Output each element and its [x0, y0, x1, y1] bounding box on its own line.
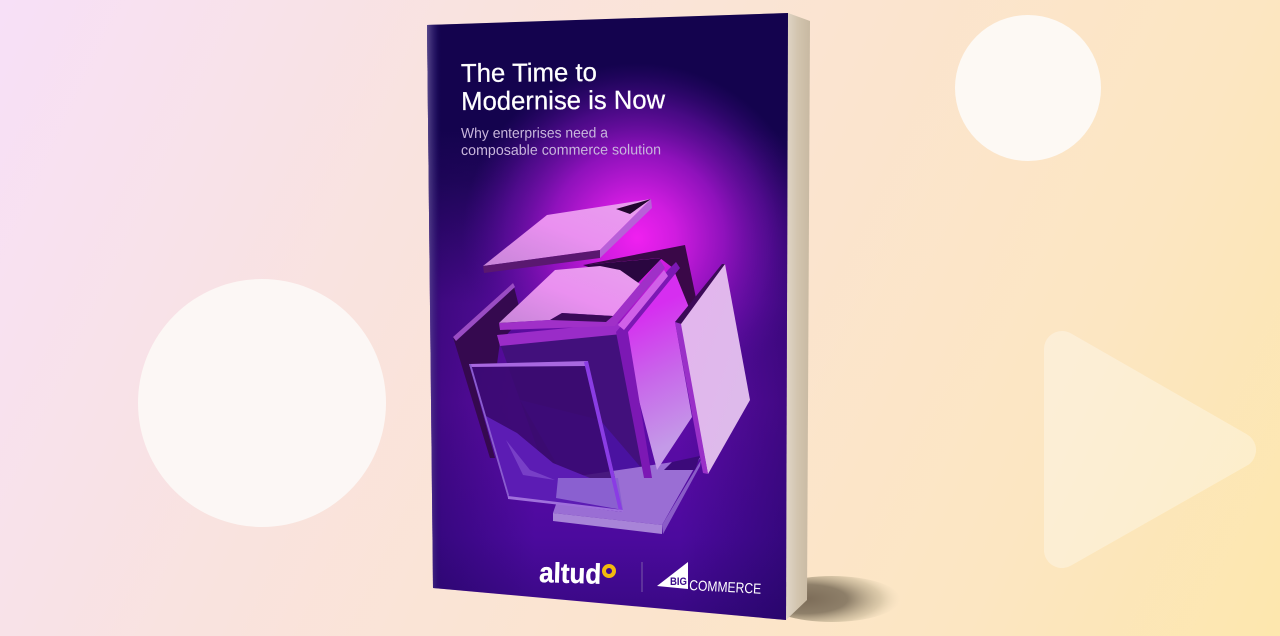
- logo divider: [641, 562, 643, 592]
- BigCommerce logo: [657, 562, 762, 598]
- BigCommerce logo: BIG: [670, 576, 687, 588]
- bottom glass plate: [553, 456, 701, 534]
- book page edges: [786, 13, 810, 620]
- BigCommerce logo: COMMERCE: [689, 578, 762, 598]
- inner box body: [497, 327, 650, 478]
- cover subtitle: [461, 125, 661, 159]
- right glass pane: [675, 264, 750, 474]
- front glass pane: [469, 361, 623, 512]
- decorative circle top right: [955, 15, 1101, 161]
- top glass plate: [483, 199, 652, 273]
- left back pane: [453, 283, 522, 458]
- back dark frame: [583, 245, 696, 312]
- decorative circle left: [138, 279, 386, 527]
- cover title: [461, 56, 665, 116]
- cover title: The Time to: [461, 57, 597, 88]
- decorative play triangle: [1062, 349, 1238, 550]
- exploded glass cube: [453, 199, 750, 534]
- cover subtitle: Why enterprises need a: [461, 125, 609, 142]
- book cover: [420, 5, 795, 630]
- book shadow: [764, 576, 900, 622]
- cover title: Modernise is Now: [461, 84, 665, 116]
- altudo logo: altud: [539, 557, 602, 590]
- middle right pane: [620, 268, 692, 470]
- cover subtitle: composable commerce solution: [461, 142, 661, 159]
- book: [420, 5, 810, 630]
- inner top plate: [499, 258, 665, 330]
